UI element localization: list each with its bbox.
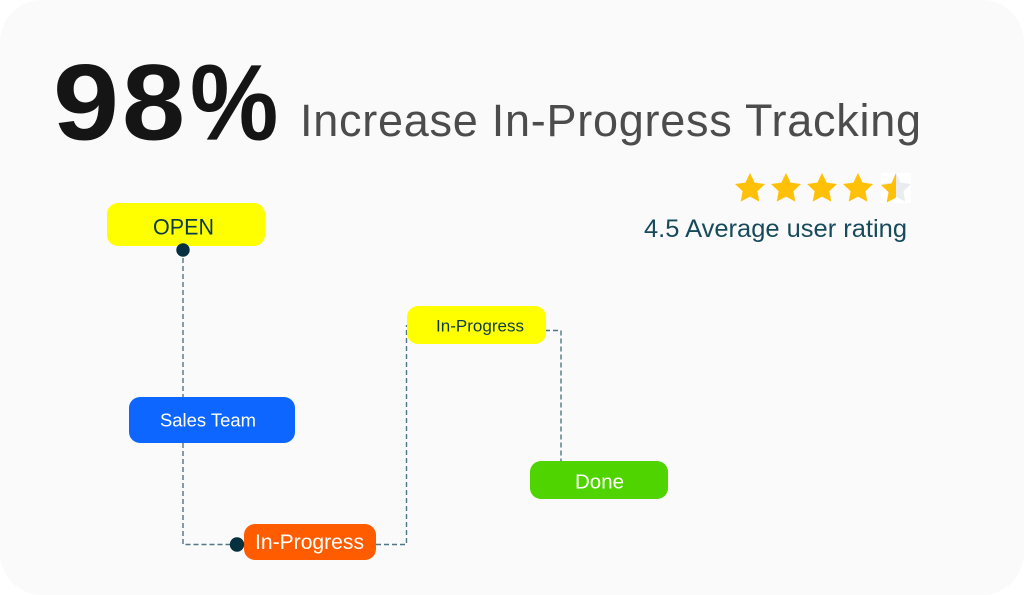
connector dot: open [176, 243, 190, 257]
node: In-Progress orange [244, 524, 376, 560]
node: Sales Team [129, 397, 295, 443]
rating caption: 4.5 Average user rating [644, 215, 907, 243]
headline text: Increase In-Progress Tracking [300, 95, 921, 146]
headline stat: 98% [53, 42, 278, 163]
node: OPEN: OPEN [153, 214, 214, 239]
node: Done: Done [575, 471, 624, 494]
node: In-Progress yellow [407, 306, 546, 344]
node: Sales Team: Sales Team [160, 411, 256, 431]
headline stat: 98%: 8 [122, 43, 185, 163]
connector dot: in-progress [230, 537, 244, 552]
node: In-Progress orange: In-Progress [255, 531, 364, 554]
headline stat: 98%: % [190, 42, 278, 162]
node: Done [530, 461, 668, 499]
dashed connectors [183, 250, 561, 544]
headline stat: 98%: 9 [53, 42, 119, 163]
node: OPEN [107, 203, 265, 246]
star rating [735, 173, 911, 203]
node: In-Progress yellow: In-Progress [436, 317, 524, 336]
